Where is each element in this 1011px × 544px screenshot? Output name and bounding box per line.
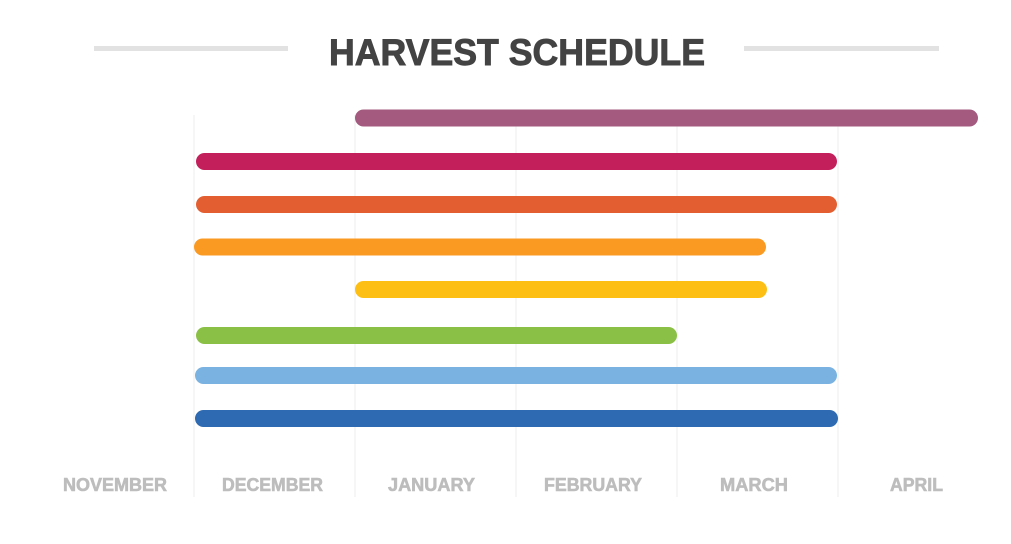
label: April: APRIL [890,475,943,495]
label: November: NOVEMBER [63,475,167,495]
month axis labels [63,475,943,495]
label: February: FEBRUARY [544,475,642,495]
chart: harvest bars [194,110,978,427]
label: January: JANUARY [388,475,475,495]
label: December: DECEMBER [222,475,323,495]
title with side rules: HARVEST SCHEDULE [329,32,705,73]
bar: light blue, December to March [195,367,837,384]
bar: orange-red, December to March [196,196,837,213]
bar: crimson, December to March [196,153,837,170]
bar: dark blue, December to March [195,410,838,427]
bar: orange, December to late March [194,238,766,256]
bar: yellow, January to late March [355,281,767,298]
title with side rules [94,32,939,73]
label: March: MARCH [720,475,788,495]
bar: purple, January to mid April [355,110,978,126]
bar: green, December to February [196,327,677,344]
